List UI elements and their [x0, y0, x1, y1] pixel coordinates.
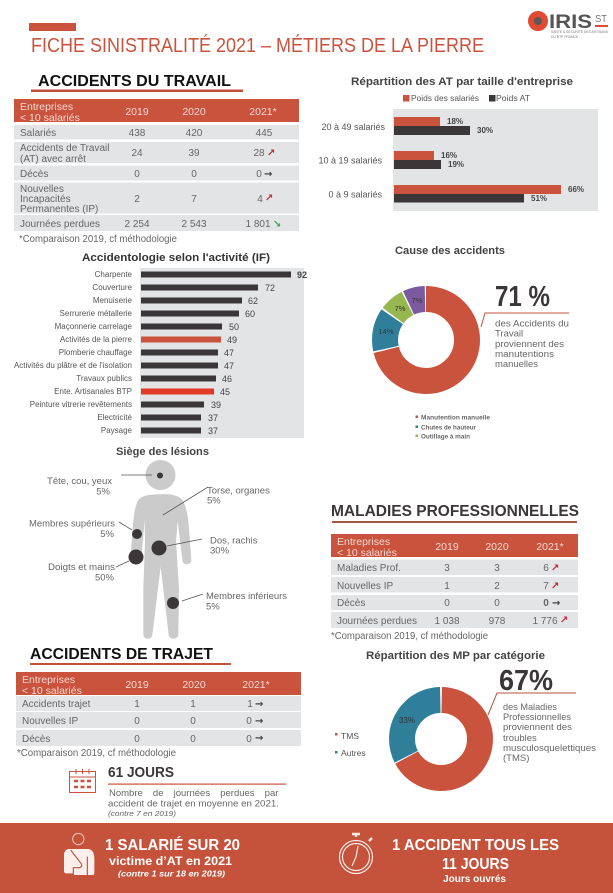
callout: 71 % [481, 281, 569, 370]
diagram: siège des lésions: 50% [95, 572, 115, 584]
chart: répartition des MP par catégorie: Répartition des MP par catégorie [366, 650, 545, 662]
stat: 1 accident tous les 11 jours [392, 837, 559, 885]
table: maladies professionnelles: 1 [444, 581, 450, 592]
legend: cause des accidents: Manutention manuelle [421, 414, 490, 422]
chart: accidentologie selon l'activité: 92 [297, 270, 307, 280]
table: maladies professionnelles: Entreprises [337, 536, 390, 548]
diagram: siège des lésions: 30% [210, 546, 230, 556]
stat: 1 accident tous les 11 jours: 11 JOURS [442, 856, 509, 873]
callout: 67%: des Maladies [503, 702, 557, 713]
stat: 1 salarié sur 20: (contre 1 sur 18 en 2019) [118, 870, 225, 878]
section: accidents de trajet [16, 646, 301, 759]
table: accidents du travail: 7 [191, 194, 197, 205]
table: maladies professionnelles: 978 [489, 616, 506, 627]
table: accidents de trajet: < 10 salariés [22, 685, 82, 697]
chart: accidentologie selon l'activité: 49 [227, 335, 237, 345]
table: maladies professionnelles: 2 [494, 581, 500, 592]
table: accidents du travail: 4 [257, 194, 263, 205]
diagram: siège des lésions: 5% [100, 529, 115, 540]
table: accidents de trajet: → [255, 716, 263, 727]
icon: stopwatch [340, 834, 372, 874]
chart: accidentologie selon l'activité: 46 [222, 374, 232, 384]
chart: répartition des AT par taille d'entreprise: 66% [568, 185, 584, 194]
table: maladies professionnelles: 2020 [485, 541, 509, 553]
table: accidents de trajet: → [255, 699, 263, 710]
title accent bar [29, 23, 76, 31]
table: accidents de trajet: 2020 [182, 679, 206, 691]
chart: accidentologie selon l'activité [14, 252, 307, 438]
diagram: siège des lésions: Siège des lésions [116, 446, 209, 458]
legend: cause des accidents [416, 414, 490, 440]
chart: cause des accidents [378, 245, 569, 440]
chart: accidentologie selon l'activité: Travaux publics [76, 374, 132, 383]
donut: répartition des MP [402, 700, 480, 778]
table: accidents de trajet: → [255, 733, 263, 744]
chart: répartition des MP par catégorie [335, 650, 596, 778]
chart: accidentologie selon l'activité: 60 [245, 309, 255, 319]
table: maladies professionnelles [331, 534, 578, 628]
table: maladies professionnelles: 3 [444, 563, 450, 574]
donut: cause des accidents [385, 299, 467, 381]
heading: accidents de trajet: ACCIDENTS DE TRAJET [30, 646, 213, 663]
table: accidents du travail: 1 801 [245, 219, 271, 230]
table: accidents du travail: Salariés [20, 128, 56, 139]
table: maladies professionnelles: 0 [543, 598, 549, 609]
table: accidents de trajet: 0 [190, 716, 196, 727]
legend: MP [335, 731, 366, 758]
table: accidents du travail: ↗ [265, 193, 273, 204]
diagram: siège des lésions: Doigts et mains [48, 562, 115, 573]
table: accidents du travail: 2019 [125, 106, 149, 118]
callout: 61 jours: Nombre de journées perdues par [109, 788, 278, 799]
chart: répartition des AT par taille d'entreprise [318, 76, 598, 211]
table: accidents du travail: Entreprises [20, 101, 73, 113]
callout: 71 %: manutentions [495, 349, 554, 360]
callout: 67%: troubles [503, 733, 537, 744]
table: accidents du travail: (AT) avec arrêt [20, 154, 86, 165]
table: accidents de trajet: Nouvelles IP [22, 716, 78, 727]
table: maladies professionnelles: Maladies Prof. [337, 563, 401, 574]
chart: répartition des AT par taille d'entreprise: Poids AT [496, 93, 530, 103]
table: accidents du travail: 24 [131, 148, 143, 159]
table: maladies professionnelles: ↗ [551, 581, 559, 592]
table: accidents de trajet: 2021* [242, 679, 270, 691]
diagram: siège des lésions [29, 446, 287, 639]
chart: accidentologie selon l'activité: 45 [220, 387, 230, 397]
table: accidents du travail: < 10 salariés [20, 112, 80, 124]
table footnote: *Comparaison 2019, cf méthodologie [19, 234, 177, 245]
table: accidents du travail: Nouvelles [20, 184, 64, 195]
callout: 61 jours: (contre 7 en 2019) [108, 811, 176, 818]
table: maladies professionnelles: 2019 [435, 541, 459, 553]
chart: accidentologie selon l'activité: Menuiserie [93, 296, 133, 305]
table: maladies professionnelles: 1 776 [532, 616, 558, 627]
callout: 67%: proviennent des [503, 722, 572, 733]
table footnote: *Comparaison 2019, cf méthodologie [17, 748, 176, 759]
title: FICHE SINISTRALITÉ 2021 – MÉTIERS DE LA PIERRE [31, 34, 484, 57]
table: accidents de trajet: 1 [134, 699, 140, 710]
table: maladies professionnelles: 7 [543, 581, 549, 592]
callout: 67%: 67% [499, 665, 553, 697]
chart: répartition des AT par taille d'entreprise: 0 à 9 salariés [328, 190, 382, 200]
table: maladies professionnelles: 1 038 [434, 616, 460, 627]
heading underline [31, 90, 243, 92]
callout: 71 %: manuelles [495, 359, 538, 370]
logo: IRIS ST [531, 12, 609, 39]
callout: 67%: (TMS) [503, 753, 529, 764]
chart: cause des accidents: Cause des accidents [395, 245, 505, 257]
table: accidents du travail: 420 [186, 128, 203, 139]
chart: accidentologie selon l'activité: Ente. Artisanales BTP [54, 387, 132, 396]
chart: accidentologie selon l'activité: Charpente [95, 270, 133, 279]
stat: 1 accident tous les 11 jours: 1 ACCIDENT TOUS LES [392, 837, 559, 854]
chart: accidentologie selon l'activité: Activités du plâtre et de l'isolation [14, 361, 132, 370]
table: accidents de trajet: 0 [190, 734, 196, 745]
chart: répartition des AT par taille d'entreprise: Répartition des AT par taille d'entreprise [351, 76, 573, 88]
table: accidents du travail: Accidents de Travail [20, 143, 110, 154]
table: maladies professionnelles: Nouvelles IP [337, 581, 393, 592]
chart: répartition des AT par taille d'entreprise: 19% [448, 160, 464, 169]
chart: accidentologie selon l'activité: 62 [248, 296, 258, 306]
table: accidents du travail: 0 [256, 169, 262, 180]
table: accidents du travail: 39 [188, 148, 200, 159]
stat: 1 salarié sur 20: victime d’AT en 2021 [109, 854, 232, 868]
callout: 71 %: Travail [495, 328, 523, 340]
heading: accidents du travail: ACCIDENTS DU TRAVAIL [38, 73, 231, 90]
stat: 1 salarié sur 20 [105, 835, 240, 878]
chart: accidentologie selon l'activité: 50 [229, 322, 239, 332]
table: accidents de trajet: Accidents trajet [22, 699, 91, 710]
chart: accidentologie selon l'activité: Peinture vitrerie revêtements [30, 400, 132, 409]
logo: IRIS ST: SANTÉ & SÉCURITÉ DES ARTISANS [551, 29, 609, 34]
callout: 67%: musculosquelettiques [503, 743, 596, 754]
table: accidents de trajet: Entreprises [22, 674, 75, 686]
section: accidents du travail [14, 73, 299, 245]
logo: IRIS ST: IRIS [549, 12, 592, 33]
icon: human body [131, 460, 191, 639]
table: accidents du travail: 2021* [249, 106, 277, 118]
section: maladies professionnelles [331, 503, 579, 642]
diagram: siège des lésions: Dos, rachis [210, 536, 258, 546]
table: accidents de trajet: 0 [246, 734, 252, 745]
chart: accidentologie selon l'activité: 39 [211, 400, 221, 410]
footer banner [0, 823, 613, 893]
chart: accidentologie selon l'activité: Paysage [101, 426, 133, 435]
table: accidents du travail: 438 [129, 128, 146, 139]
table footnote: *Comparaison 2019, cf méthodologie [331, 631, 488, 642]
table: maladies professionnelles: → [552, 598, 560, 609]
table: maladies professionnelles: < 10 salariés [337, 547, 397, 559]
table: maladies professionnelles: Journées perdues [337, 616, 417, 627]
chart: répartition des AT par taille d'entreprise: 51% [531, 194, 547, 203]
heading underline [30, 663, 231, 665]
table: accidents du travail: Décès [20, 169, 48, 180]
chart: accidentologie selon l'activité: 47 [224, 361, 234, 371]
chart: accidentologie selon l'activité: Activités de la pierre [60, 335, 133, 344]
table: accidents de trajet: 0 [134, 716, 140, 727]
table: accidents du travail [14, 99, 299, 231]
chart: cause des accidents: 14% [378, 327, 394, 336]
table: accidents du travail: 2 254 [124, 219, 150, 230]
table: maladies professionnelles: Décès [337, 598, 365, 609]
callout: 71 %: des Accidents du [495, 318, 569, 330]
table: maladies professionnelles: 6 [543, 563, 549, 574]
chart: cause des accidents: 7% [412, 296, 423, 305]
stat: 1 salarié sur 20: 1 SALARIÉ SUR 20 [105, 835, 240, 854]
chart: accidentologie selon l'activité: 72 [265, 283, 275, 293]
diagram: siège des lésions: Membres supérieurs [29, 518, 115, 530]
table: accidents de trajet: 2019 [125, 679, 149, 691]
table: maladies professionnelles: 0 [444, 598, 450, 609]
diagram: siège des lésions: 5% [96, 486, 111, 498]
legend: cause des accidents: Chutes de hauteur [421, 424, 476, 432]
table: accidents du travail: ↗ [267, 148, 275, 159]
heading underline [332, 521, 577, 523]
chart: accidentologie selon l'activité: Plomberie chauffage [59, 348, 133, 357]
table: accidents de trajet: 0 [134, 734, 140, 745]
chart: accidentologie selon l'activité: 37 [208, 413, 218, 423]
diagram: siège des lésions: 5% [206, 602, 220, 612]
chart: accidentologie selon l'activité: Electricité [97, 413, 133, 422]
callout: 67% [488, 665, 596, 764]
table: accidents de trajet: Décès [22, 734, 50, 745]
callout: 67%: Professionnelles [503, 712, 571, 723]
chart: répartition des AT par taille d'entreprise: 20 à 49 salariés [321, 122, 385, 132]
table: accidents du travail: 28 [253, 148, 265, 159]
chart: accidentologie selon l'activité: Accidentologie selon l'activité (IF) [82, 252, 270, 264]
legend: MP: TMS [341, 731, 359, 741]
callout: 71 %: 71 % [495, 281, 550, 313]
legend: cause des accidents: Outillage à main [421, 434, 470, 440]
table: accidents du travail: 445 [256, 128, 273, 139]
table: maladies professionnelles: 2021* [536, 541, 564, 553]
diagram: siège des lésions: Torse, organes [207, 486, 270, 496]
diagram: siège des lésions: 5% [207, 496, 221, 506]
table: maladies professionnelles: 3 [494, 563, 500, 574]
table: maladies professionnelles: 0 [494, 598, 500, 609]
chart: répartition des AT par taille d'entreprise: 18% [447, 117, 463, 126]
table: accidents du travail: Permanentes (IP) [20, 204, 98, 215]
chart: accidentologie selon l'activité: Maçonnerie carrelage [55, 322, 133, 331]
table: accidents du travail: 2020 [182, 106, 206, 118]
table: accidents de trajet [16, 672, 301, 746]
heading: maladies professionnelles: MALADIES PROFESSIONNELLES [331, 503, 579, 520]
table: accidents du travail: 0 [191, 169, 197, 180]
table: accidents de trajet: 1 [190, 699, 196, 710]
callout: 61 jours: 61 JOURS [108, 764, 174, 781]
diagram: siège des lésions: Membres inférieurs [206, 591, 287, 602]
chart: répartition des AT par taille d'entreprise: Poids des salariés [411, 93, 479, 103]
table: accidents du travail: Journées perdues [20, 219, 100, 230]
chart: répartition des AT par taille d'entreprise: 10 à 19 salariés [318, 156, 382, 166]
table: accidents du travail: 2 [134, 194, 140, 205]
table: accidents du travail: → [264, 169, 272, 180]
stat: 1 accident tous les 11 jours: Jours ouvrés [443, 874, 506, 885]
logo: IRIS ST: ST [595, 14, 607, 25]
callout: 61 jours: accident de trajet en moyenne en 2021. [108, 798, 279, 810]
chart: cause des accidents: 7% [395, 304, 406, 313]
chart: accidentologie selon l'activité: Couverture [92, 283, 133, 292]
icon: calendar [70, 769, 96, 792]
table: accidents du travail: 0 [134, 169, 140, 180]
chart: accidentologie selon l'activité: Serrurerie métallerie [60, 309, 133, 318]
table: accidents du travail: ↘ [273, 219, 281, 230]
callout: 61 jours [108, 764, 286, 818]
table: accidents du travail: Incapacités [20, 194, 71, 205]
chart: répartition des MP par catégorie: 33% [399, 716, 415, 725]
chart: répartition des AT par taille d'entreprise: 30% [477, 126, 493, 135]
chart: répartition des AT par taille d'entreprise: 16% [441, 151, 457, 160]
callout: 71 %: proviennent des [495, 339, 564, 350]
logo: IRIS ST: DU BTP FRANCE [551, 35, 579, 39]
chart: accidentologie selon l'activité: 47 [224, 348, 234, 358]
icon: injured worker [64, 833, 94, 875]
chart: accidentologie selon l'activité: 37 [208, 426, 218, 436]
table: accidents du travail: 2 543 [181, 219, 207, 230]
table: maladies professionnelles: ↗ [551, 563, 559, 574]
diagram: siège des lésions: Tête, cou, yeux [47, 476, 112, 487]
table: accidents de trajet: 1 [247, 699, 253, 710]
legend: MP: Autres [341, 748, 366, 758]
table: accidents de trajet: 0 [246, 716, 252, 727]
table: maladies professionnelles: ↗ [560, 615, 568, 626]
